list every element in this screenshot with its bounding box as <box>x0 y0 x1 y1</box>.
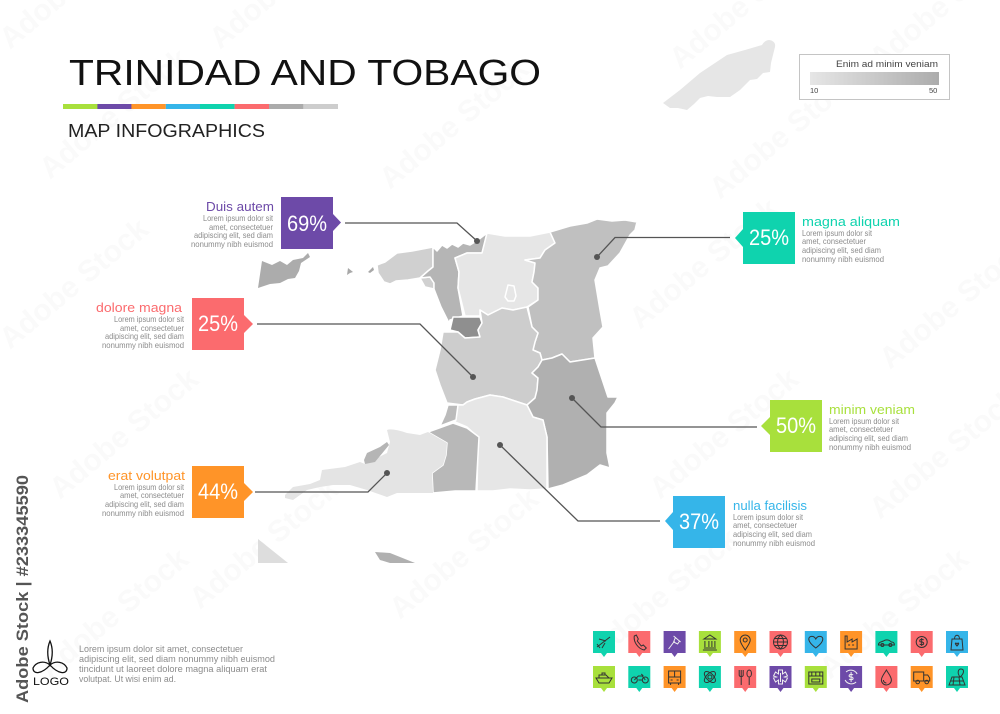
callout: erat volutpat: adipiscing elit, sed diam <box>105 499 184 509</box>
region: northeast <box>525 219 637 362</box>
title: TRINIDAD AND TOBAGO <box>69 52 541 93</box>
callout: minim veniam: Lorem ipsum dolor sit <box>829 416 900 426</box>
text: Adobe Stock <box>183 472 345 615</box>
callout: erat volutpat: 44% <box>198 479 238 504</box>
map of Trinidad and Tobago <box>258 40 775 563</box>
logo <box>33 641 69 688</box>
callout: erat volutpat <box>102 466 390 518</box>
callout: nulla facilisis: nonummy nibh euismod <box>733 538 815 548</box>
region: northwest peninsula <box>377 247 433 284</box>
text: Adobe Stock <box>623 192 785 335</box>
icon: dollar cycle <box>840 666 862 692</box>
callout: dolore magna: dolore magna <box>96 301 182 315</box>
callout: minim veniam: nonummy nibh euismod <box>829 442 911 452</box>
text: Adobe Stock <box>813 542 975 685</box>
callout: dolore magna: Lorem ipsum dolor sit <box>114 314 185 324</box>
callout: dolore magna: nonummy nibh euismod <box>102 340 184 350</box>
region: centre dark <box>450 317 482 338</box>
legend: Enim ad minim veniam <box>836 59 938 70</box>
text: Adobe Stock <box>373 52 535 195</box>
callout: nulla facilisis <box>497 442 815 548</box>
callout: Duis autem: amet, consectetuer <box>209 222 273 232</box>
callout: dolore magna: 25% <box>198 311 238 336</box>
text: Adobe Stock <box>643 362 805 505</box>
text: Adobe Stock <box>43 362 205 505</box>
colour bar <box>63 104 338 109</box>
callout: minim veniam: amet, consectetuer <box>829 424 893 434</box>
callout: dolore magna <box>96 298 476 380</box>
text: Adobe Stock <box>33 42 195 185</box>
icon: pin <box>664 631 686 657</box>
callout: magna aliquam <box>594 212 900 264</box>
callout: erat volutpat: nonummy nibh euismod <box>102 508 184 518</box>
legend: 50 <box>929 86 937 95</box>
region: southern islet light <box>258 539 288 563</box>
callout: Duis autem: Lorem ipsum dolor sit <box>203 213 274 223</box>
icon: factory <box>840 631 862 657</box>
icon: car <box>875 631 897 657</box>
icon: water drop <box>875 666 897 692</box>
callout: nulla facilisis: Lorem ipsum dolor sit <box>733 512 804 522</box>
callout: magna aliquam: nonummy nibh euismod <box>802 254 884 264</box>
region: lake outline <box>505 285 516 301</box>
callout: erat volutpat: amet, consectetuer <box>120 490 184 500</box>
logo: LOGO <box>33 676 69 688</box>
footer text: tincidunt ut laoreet dolore magna aliquam erat <box>79 664 267 675</box>
callout: nulla facilisis: nulla facilisis <box>733 499 807 513</box>
callout: Duis autem: 69% <box>287 211 327 236</box>
region: southwest pond <box>364 442 389 464</box>
region: Tobago <box>663 40 775 110</box>
callout: magna aliquam: magna aliquam <box>802 215 900 229</box>
icon: motorbike <box>628 666 650 692</box>
icon: bank <box>699 631 721 657</box>
region: north central light <box>455 232 555 316</box>
text: Adobe Stock <box>703 62 865 205</box>
region: small south <box>440 405 458 426</box>
region: southwest peninsula <box>285 429 447 500</box>
callout: dolore magna: amet, consectetuer <box>120 323 184 333</box>
callout: magna aliquam: adipiscing elit, sed diam <box>802 245 881 255</box>
callout: Duis autem <box>191 197 480 249</box>
footer text: adipiscing elit, sed diam nonummy nibh euismod <box>79 654 275 665</box>
callout: nulla facilisis: adipiscing elit, sed diam <box>733 529 812 539</box>
callout: magna aliquam: amet, consectetuer <box>802 236 866 246</box>
callout: nulla facilisis: amet, consectetuer <box>733 520 797 530</box>
callout: minim veniam <box>569 395 915 452</box>
region: west central <box>435 307 542 405</box>
region: northwest dark <box>420 233 487 323</box>
callout: magna aliquam: 25% <box>749 225 789 250</box>
icon: atom <box>699 666 721 692</box>
callout: magna aliquam: Lorem ipsum dolor sit <box>802 228 873 238</box>
icon: globe <box>770 631 792 657</box>
callout: nulla facilisis: 37% <box>679 509 719 534</box>
legend: 10 <box>810 86 818 95</box>
legend <box>800 54 950 100</box>
footer text: volutpat. Ut wisi enim ad. <box>79 674 176 685</box>
footer text: Lorem ipsum dolor sit amet, consectetuer <box>79 644 243 655</box>
icon: location <box>734 631 756 657</box>
region: islets <box>347 267 374 275</box>
icon grid <box>593 631 968 692</box>
icon: shop <box>805 666 827 692</box>
callout: Duis autem: nonummy nibh euismod <box>191 239 273 249</box>
text: Adobe Stock <box>383 482 545 625</box>
icon: cutlery <box>734 666 756 692</box>
callout: minim veniam: adipiscing elit, sed diam <box>829 433 908 443</box>
region: south dark <box>428 423 479 493</box>
icon: bus <box>664 666 686 692</box>
region: south central light <box>455 395 547 491</box>
region: northwest island <box>258 253 310 288</box>
icon: truck <box>911 666 933 692</box>
callout: minim veniam: minim veniam <box>829 403 915 417</box>
icon: heart <box>805 631 827 657</box>
icon: medical star <box>770 666 792 692</box>
callout: minim veniam: 50% <box>776 413 816 438</box>
stock image id: Adobe Stock | #233345590 <box>13 475 32 703</box>
icon: map <box>946 666 968 692</box>
region: small northwest <box>420 277 434 289</box>
icon: ship <box>593 666 615 692</box>
icon: shopping bag <box>946 631 968 657</box>
icon: phone <box>628 631 650 657</box>
text: Adobe Stock <box>33 542 195 685</box>
callout: Duis autem: Duis autem <box>206 200 274 214</box>
region: east <box>527 354 618 489</box>
callout: Duis autem: adipiscing elit, sed diam <box>194 230 273 240</box>
callout: erat volutpat: erat volutpat <box>108 469 186 483</box>
footer text <box>79 644 275 685</box>
callout: erat volutpat: Lorem ipsum dolor sit <box>114 482 185 492</box>
icon: dollar coin <box>911 631 933 657</box>
text: Adobe Stock <box>583 522 745 665</box>
icon: plane <box>593 631 615 657</box>
subtitle: MAP INFOGRAPHICS <box>68 121 265 141</box>
callout: dolore magna: adipiscing elit, sed diam <box>105 331 184 341</box>
region: southern islet dark <box>375 552 415 563</box>
